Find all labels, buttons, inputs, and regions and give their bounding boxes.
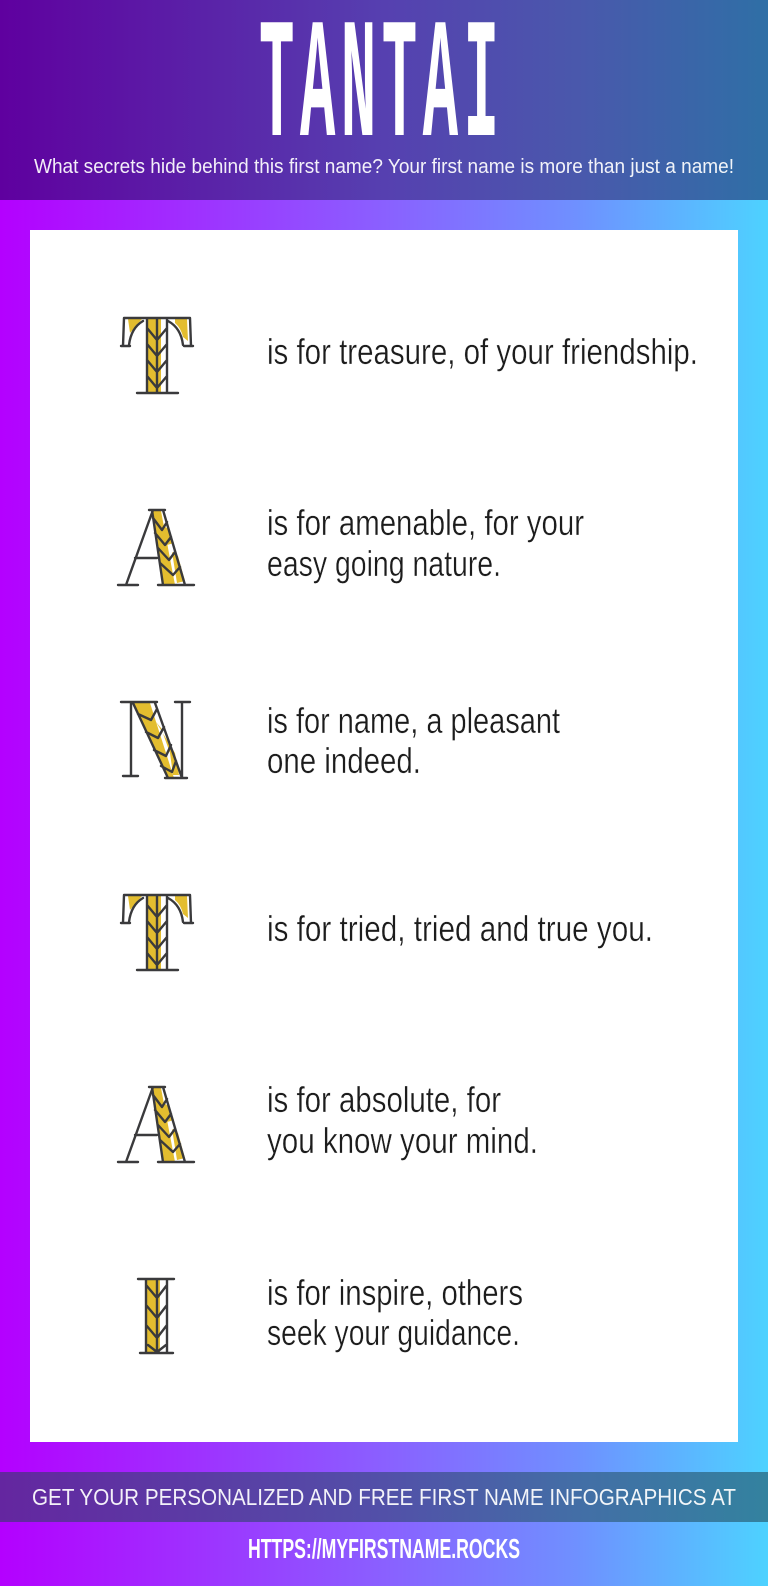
text: A amenable: easy going nature. [267, 543, 501, 584]
panel: letters [30, 230, 738, 1442]
text: I inspire: seek your guidance. [267, 1312, 520, 1353]
icon: letter T [121, 895, 193, 970]
icon: letter N [121, 702, 190, 778]
text: I inspire [267, 1272, 523, 1353]
text: A absolute [267, 1079, 538, 1161]
text: N name: is for name, a pleasant [267, 700, 560, 741]
text: N name: one indeed. [267, 740, 421, 781]
footer url: HTTPS://MYFIRSTNAME.ROCKS [248, 1533, 520, 1564]
text: A amenable [267, 502, 584, 584]
text: A absolute: you know your mind. [267, 1120, 538, 1161]
text: A amenable: is for amenable, for your [267, 502, 584, 543]
text: A absolute: is for absolute, for [267, 1079, 501, 1120]
text: I inspire: is for inspire, others [267, 1272, 523, 1313]
icon: letter T [121, 318, 193, 393]
header band [0, 0, 768, 200]
subtitle: What secrets hide behind this first name? Your first name is more than just a name! [34, 156, 734, 178]
text: T tried: is for tried, tried and true you. [267, 908, 653, 949]
icon: letter A [118, 1087, 194, 1162]
icon: letter I [138, 1279, 174, 1353]
icon: letter A [118, 510, 194, 585]
footer band [0, 1472, 768, 1522]
text: N name [267, 700, 560, 781]
